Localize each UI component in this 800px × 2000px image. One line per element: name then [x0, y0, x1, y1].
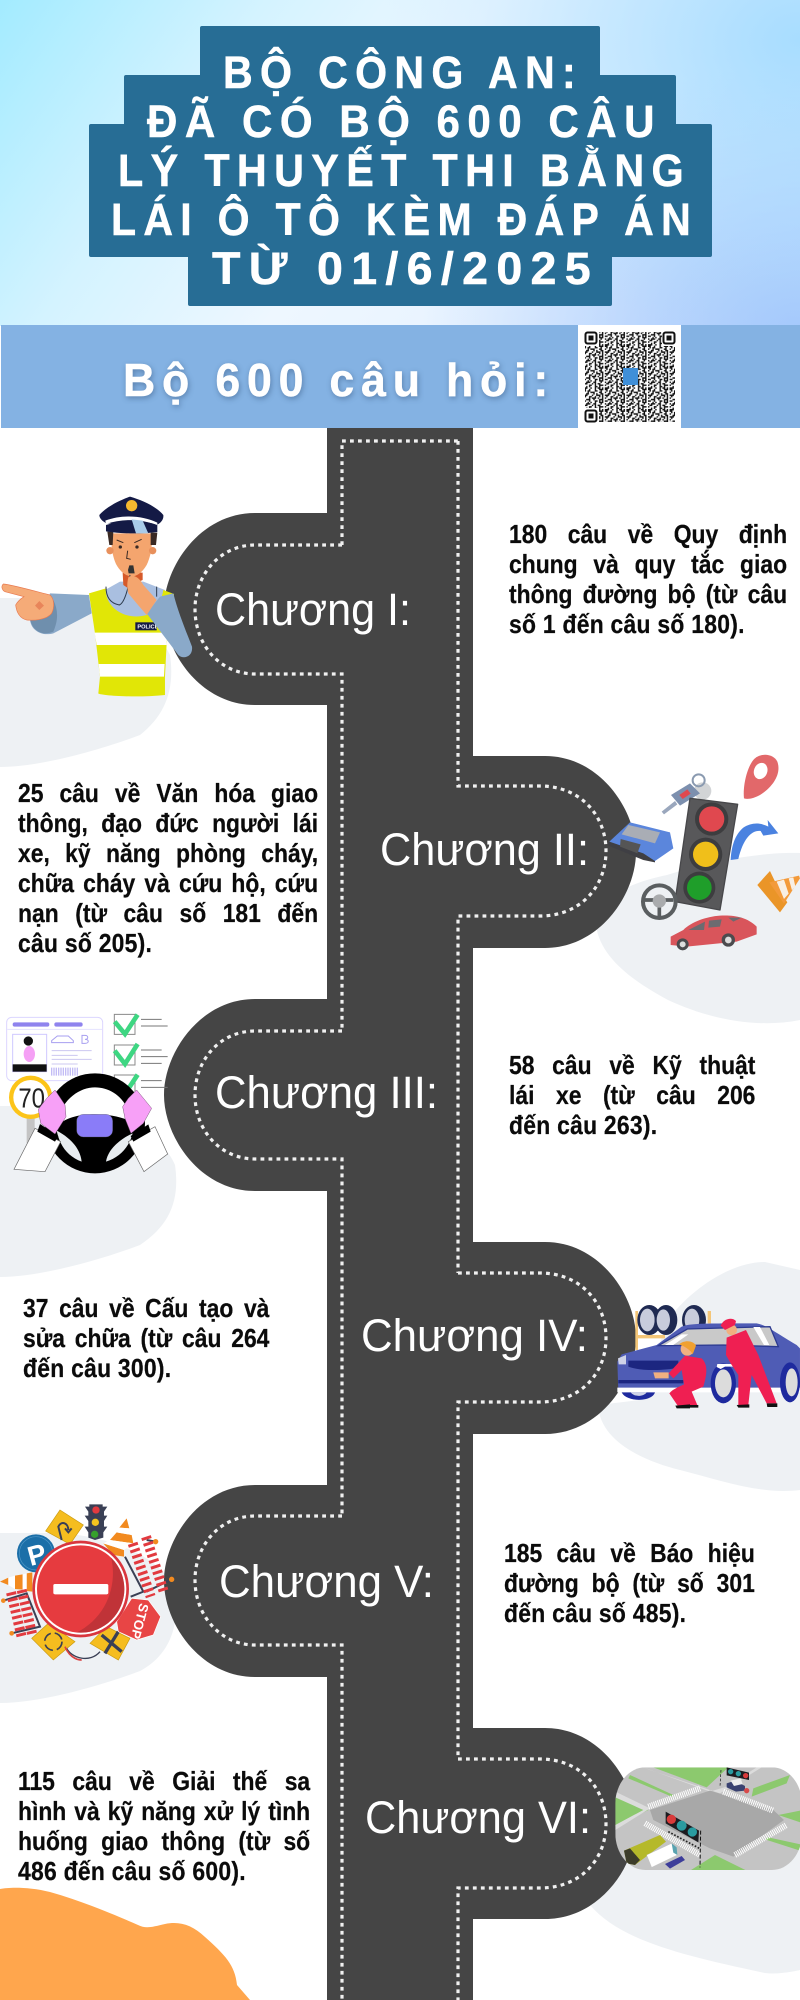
text: chapter II description [18, 778, 318, 958]
text: chapter II description: thông, đạo đức người lái [18, 808, 318, 838]
icon: road signs [0, 1504, 174, 1660]
text: chapter V description: đường bộ (từ số 301 [504, 1568, 755, 1598]
icon: police officer: POLICE [137, 624, 159, 630]
icon: police officer [2, 497, 192, 696]
text: chapter III description [509, 1050, 756, 1140]
text: chapter VI description: hình và kỹ năng xử lý tình [18, 1796, 310, 1826]
title text: TỪ 01/6/2025 [212, 243, 599, 294]
text: chapter IV description [23, 1293, 270, 1383]
chapter VI label: Chương VI: [365, 1792, 591, 1843]
text: chapter II description: 25 câu về Văn hóa giao [18, 778, 318, 808]
road [164, 428, 636, 2000]
icon: license test and steering wheel [7, 1014, 168, 1173]
text: chapter IV description: đến câu 300). [23, 1353, 171, 1383]
text: chapter VI description: 115 câu về Giải thế sa [18, 1766, 310, 1796]
text: chapter VI description: huống giao thông (từ số [18, 1826, 310, 1856]
soft background blobs [0, 598, 800, 1973]
text: chapter I description: 180 câu về Quy định [509, 519, 787, 549]
title panel [89, 26, 712, 306]
icon: traffic light and car items [608, 755, 800, 950]
text: chapter V description: đến câu số 485). [504, 1598, 686, 1628]
chapter V label: Chương V: [219, 1556, 434, 1607]
text: chapter V description [504, 1538, 755, 1628]
title text [111, 47, 698, 294]
text: chapter I description: số 1 đến câu số 180). [509, 609, 745, 639]
band label: Bộ 600 câu hỏi: [123, 354, 555, 406]
text: chapter III description: đến câu 263). [509, 1110, 657, 1140]
text: chapter V description: 185 câu về Báo hiệu [504, 1538, 755, 1568]
text: chapter VI description: 486 đến câu số 600). [18, 1856, 246, 1886]
text: chapter IV description: sửa chữa (từ câu 264 [23, 1323, 269, 1353]
icon: license test and steering wheel: 70 [18, 1082, 45, 1113]
icon: road signs: STOP [128, 1602, 152, 1641]
text: chapter I description: thông đường bộ (từ câu [509, 579, 787, 609]
chapter III label: Chương III: [215, 1067, 438, 1118]
text: chapter I description [509, 519, 787, 639]
text: chapter IV description: 37 câu về Cấu tạo và [23, 1293, 269, 1323]
question set band [1, 325, 800, 428]
chapter I label: Chương I: [215, 584, 411, 635]
icon: road signs: P [24, 1537, 50, 1572]
text: chapter II description: câu số 205). [18, 928, 152, 958]
text: chapter II description: xe, kỹ năng phòng cháy, [18, 838, 318, 868]
title text: BỘ CÔNG AN: [223, 47, 583, 98]
text: chapter II description: nạn (từ câu số 181 đến [18, 898, 318, 928]
chapter IV label: Chương IV: [361, 1310, 588, 1361]
orange corner blob [0, 1888, 250, 2000]
QR code [578, 325, 681, 428]
text: chapter III description: 58 câu về Kỹ thuật [509, 1050, 755, 1080]
title text: LÁI Ô TÔ KÈM ĐÁP ÁN [111, 194, 698, 245]
road dashed markings [195, 441, 606, 2000]
text: chapter VI description [18, 1766, 310, 1886]
background gradient header [0, 0, 800, 326]
title text: LÝ THUYẾT THI BẰNG [118, 145, 691, 196]
text: chapter III description: lái xe (từ câu 206 [509, 1080, 755, 1110]
icon: road intersection [615, 1767, 800, 1871]
chapter II label: Chương II: [380, 824, 589, 875]
text: chapter II description: chữa cháy và cứu hộ, cứu [18, 868, 318, 898]
text: chapter I description: chung và quy tắc giao [509, 549, 787, 579]
title text: ĐÃ CÓ BỘ 600 CÂU [147, 96, 662, 147]
icon: mechanics and car [617, 1305, 800, 1408]
